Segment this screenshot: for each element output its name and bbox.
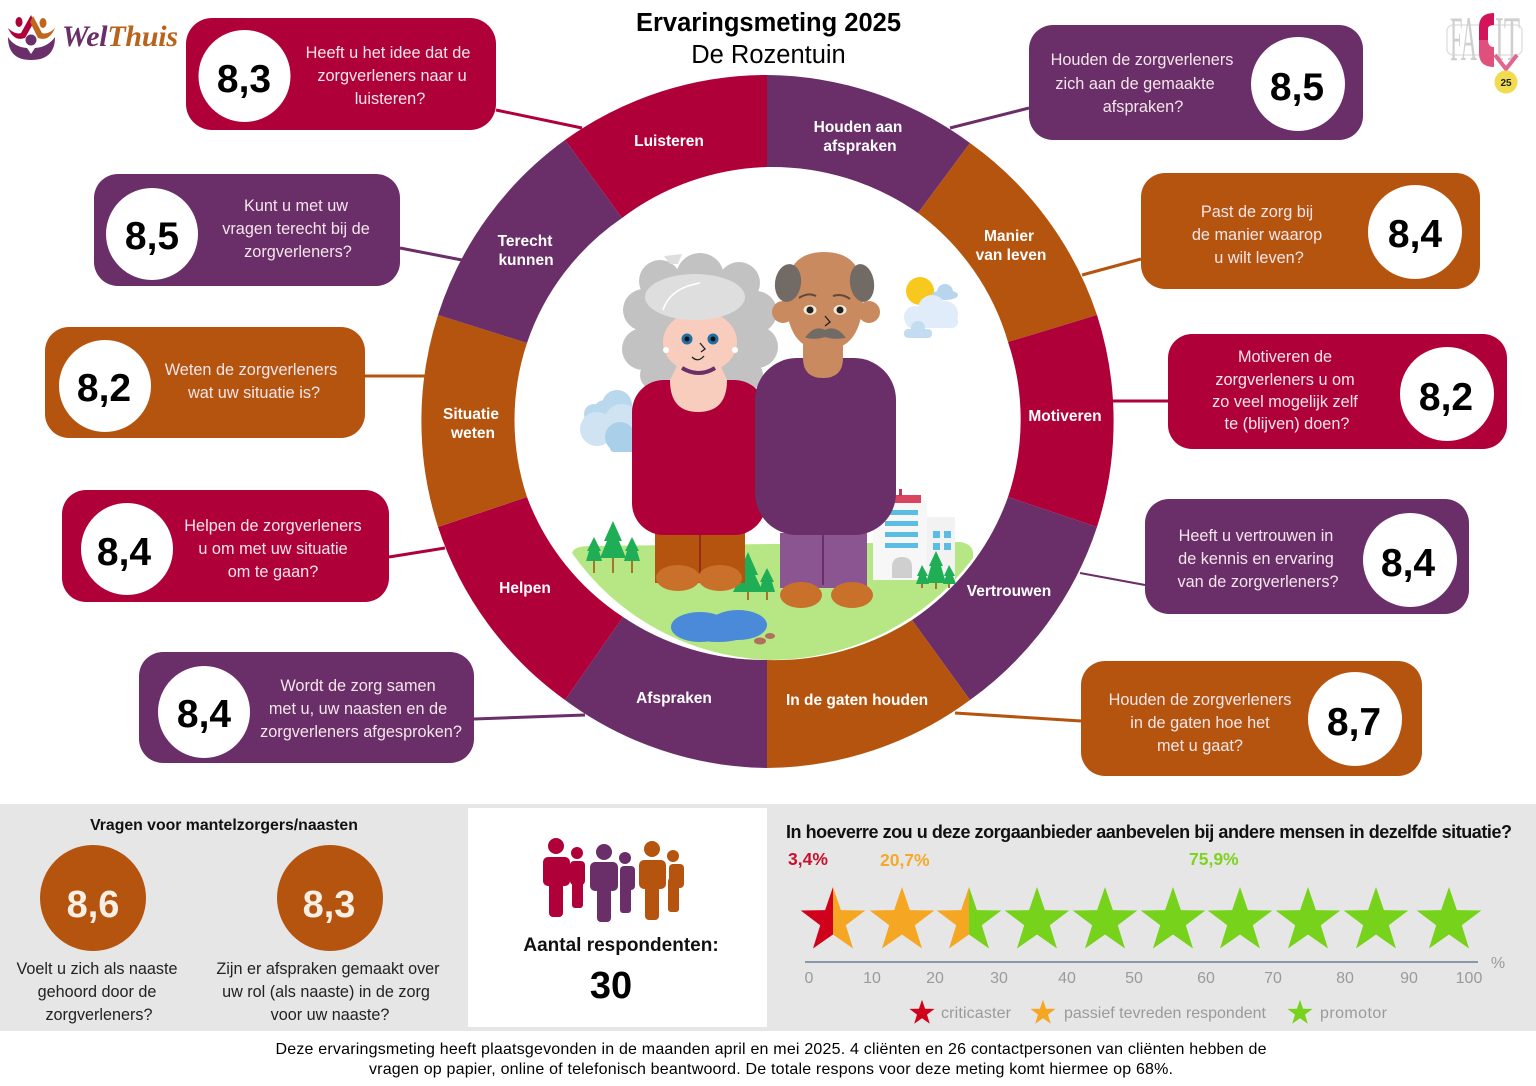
axis: 40 <box>1058 970 1076 987</box>
segment: Situatie weten: weten <box>450 425 495 442</box>
woman <box>622 253 778 591</box>
segment: Houden aan afspraken: afspraken <box>823 138 897 155</box>
title: De Rozentuin <box>691 41 846 69</box>
segment: Houden aan afspraken: Houden aan <box>814 119 902 136</box>
segment: Terecht kunnen: kunnen <box>498 252 554 269</box>
star rating <box>801 887 1481 948</box>
callout: Luisteren 8,3: zorgverleners naar u <box>317 67 467 85</box>
callout: Motiveren 8,2: zo veel mogelijk zelf <box>1212 393 1358 411</box>
panel: vragen voor mantelzorgers: gehoord door de <box>38 983 156 1001</box>
callout: Terecht kunnen 8,5: vragen terecht bij de <box>222 220 370 238</box>
callout: Helpen 8,4: om te gaan? <box>228 563 318 581</box>
panel: vragen voor mantelzorgers: Voelt u zich als naaste <box>16 960 178 978</box>
callout: Motiveren 8,2: te (blijven) doen? <box>1225 415 1349 433</box>
cloud left <box>580 390 640 452</box>
score: 8,6: 8,6 <box>67 884 119 926</box>
panel: vragen voor mantelzorgers: zorgverleners? <box>45 1006 153 1024</box>
callout: Vertrouwen 8,4: van de zorgverleners? <box>1177 573 1339 591</box>
callout: In de gaten houden 8,7: Houden de zorgverleners <box>1109 691 1291 709</box>
sun and clouds right <box>904 277 958 338</box>
segment: Terecht kunnen <box>438 140 622 343</box>
man <box>755 252 896 608</box>
segment: Vertrouwen: Vertrouwen <box>967 583 1051 600</box>
callout: Motiveren 8,2: 8,2 <box>1419 376 1473 419</box>
callout: Vertrouwen 8,4: 8,4 <box>1381 542 1435 585</box>
callout: Helpen 8,4: Helpen de zorgverleners <box>184 517 362 535</box>
callout: Situatie weten 8,2: Weten de zorgverleners <box>165 361 337 379</box>
trees <box>586 521 956 600</box>
segment: Afspraken <box>565 617 767 768</box>
panel: aanbeveling <box>786 822 1512 1024</box>
percentages <box>788 849 1239 870</box>
legend: promotor <box>1320 1005 1388 1022</box>
score: 8,6 <box>40 845 146 951</box>
title <box>636 9 901 69</box>
callout: Afspraken 8,4: met u, uw naasten en de <box>269 700 447 718</box>
logo: WelThuis <box>8 15 178 60</box>
callout: Situatie weten 8,2 <box>45 327 365 438</box>
illustration: elderly couple in landscape <box>572 252 973 660</box>
panel: aantal respondenten: Aantal respondenten: <box>523 935 719 956</box>
segment: Helpen: Helpen <box>499 580 551 597</box>
callout: Situatie weten 8,2: 8,2 <box>77 367 131 410</box>
building <box>873 489 955 580</box>
segment: In de gaten houden <box>767 620 970 768</box>
segment: Manier van leven <box>918 143 1097 342</box>
percentages: 75,9% <box>1189 849 1239 869</box>
callout: Manier van leven 8,4 <box>1141 173 1480 289</box>
segment: Houden aan afspraken <box>767 75 970 213</box>
score: 8,3: 8,3 <box>303 884 355 926</box>
callout: Houden aan afspraken 8,5: afspraken? <box>1103 98 1183 116</box>
panel: vragen voor mantelzorgers: voor uw naaste? <box>271 1006 389 1024</box>
callout: Luisteren 8,3: 8,3 <box>217 58 271 101</box>
callout: Manier van leven 8,4: de manier waarop <box>1192 226 1322 244</box>
callout: Terecht kunnen 8,5: 8,5 <box>125 215 179 258</box>
panel: aanbeveling: In hoeverre zou u deze zorgaanbieder aanbevelen bij andere mensen in dezelfde situatie? <box>786 822 1512 842</box>
pond with ducks <box>671 610 775 644</box>
title: Ervaringsmeting 2025 <box>636 9 901 37</box>
axis: 10 <box>863 970 881 987</box>
axis: 100 <box>1456 970 1482 987</box>
axis: 90 <box>1400 970 1418 987</box>
axis: 0 <box>805 970 814 987</box>
legend: passief tevreden respondent <box>1064 1005 1267 1022</box>
callout: Vertrouwen 8,4: Heeft u vertrouwen in <box>1179 527 1333 545</box>
callout: Manier van leven 8,4: 8,4 <box>1388 213 1442 256</box>
score: 8,3 <box>277 845 383 951</box>
segment: Afspraken: Afspraken <box>636 690 712 707</box>
callout: In de gaten houden 8,7: met u gaat? <box>1157 737 1243 755</box>
logo: FACIT medal: FA <box>1450 3 1477 74</box>
axis: 20 <box>926 970 944 987</box>
segment: Motiveren: Motiveren <box>1028 408 1102 425</box>
footer text <box>276 1041 1267 1078</box>
axis: 60 <box>1197 970 1215 987</box>
footer text: Deze ervaringsmeting heeft plaatsgevonden in de maanden april en mei 2025. 4 cliënten en 26 contactpersonen van cliënten hebben de <box>276 1041 1267 1058</box>
segment: Terecht kunnen: Terecht <box>498 233 552 250</box>
segment: Luisteren <box>565 75 767 218</box>
logo: FACIT medal: 25 <box>1500 78 1512 89</box>
callout: In de gaten houden 8,7 <box>1081 661 1422 776</box>
segment: In de gaten houden: In de gaten houden <box>786 692 928 709</box>
callout: Terecht kunnen 8,5: zorgverleners? <box>244 243 352 261</box>
callout: In de gaten houden 8,7: 8,7 <box>1327 701 1381 744</box>
percentages: 3,4% <box>788 849 828 869</box>
callout: Situatie weten 8,2: wat uw situatie is? <box>187 384 320 402</box>
axis: 50 <box>1125 970 1143 987</box>
percentages: 20,7% <box>880 850 930 870</box>
callout: Luisteren 8,3: luisteren? <box>355 90 425 108</box>
panel: vragen voor mantelzorgers <box>16 817 440 1024</box>
callout: Houden aan afspraken 8,5 <box>1029 25 1363 140</box>
callout: Manier van leven 8,4: u wilt leven? <box>1214 249 1304 267</box>
axis: 70 <box>1264 970 1282 987</box>
callout: Motiveren 8,2: zorgverleners u om <box>1215 371 1355 389</box>
ring of ten themes <box>421 75 1114 768</box>
segment: Luisteren: Luisteren <box>634 133 704 150</box>
callout: Afspraken 8,4: Wordt de zorg samen <box>280 677 436 695</box>
callout: Terecht kunnen 8,5 <box>94 174 400 286</box>
callout: In de gaten houden 8,7: in de gaten hoe het <box>1130 714 1270 732</box>
legend: criticaster <box>941 1005 1012 1022</box>
callout: Luisteren 8,3: Heeft u het idee dat de <box>306 44 470 62</box>
callout: Afspraken 8,4: zorgverleners afgesproken? <box>260 723 462 741</box>
ground <box>572 542 973 660</box>
panel: vragen voor mantelzorgers: Zijn er afspraken gemaakt over <box>216 960 440 978</box>
callout: Vertrouwen 8,4: de kennis en ervaring <box>1178 550 1334 568</box>
segment: Motiveren <box>1008 315 1114 527</box>
callout: Helpen 8,4: 8,4 <box>97 531 151 574</box>
callout: Motiveren 8,2 <box>1168 334 1507 449</box>
callout: Afspraken 8,4: 8,4 <box>177 693 231 736</box>
callout: Manier van leven 8,4: Past de zorg bij <box>1201 203 1313 221</box>
axis: 80 <box>1336 970 1354 987</box>
panel: vragen voor mantelzorgers: Vragen voor mantelzorgers/naasten <box>90 817 358 834</box>
panel: aantal respondenten <box>468 808 767 1027</box>
callout: Luisteren 8,3 <box>186 18 496 130</box>
segment: Manier van leven: Manier <box>984 228 1034 245</box>
connector lines <box>365 108 1168 721</box>
callout: Houden aan afspraken 8,5: Houden de zorgverleners <box>1051 51 1233 69</box>
callout: Terecht kunnen 8,5: Kunt u met uw <box>244 197 348 215</box>
axis: 30 <box>990 970 1008 987</box>
segment: Manier van leven: van leven <box>976 247 1046 264</box>
segment: Helpen <box>438 497 623 700</box>
logo: WelThuis: WelThuis <box>62 20 178 53</box>
callout: Helpen 8,4: u om met uw situatie <box>198 540 348 558</box>
segment: Vertrouwen <box>912 497 1097 700</box>
segment: Situatie weten: Situatie <box>443 406 499 423</box>
icon: people <box>543 838 684 922</box>
panel: aantal respondenten: 30 <box>590 965 632 1007</box>
callout: Houden aan afspraken 8,5: 8,5 <box>1270 66 1324 109</box>
segment: Situatie weten <box>421 315 527 527</box>
callout: Houden aan afspraken 8,5: zich aan de gemaakte <box>1055 75 1215 93</box>
axis <box>805 955 1505 987</box>
footer text: vragen op papier, online of telefonisch beantwoord. De totale respons voor deze meting komt hiermee op 68%. <box>369 1061 1173 1078</box>
callout: Afspraken 8,4 <box>139 652 474 763</box>
callout: Helpen 8,4 <box>62 490 389 602</box>
axis: % <box>1491 955 1505 972</box>
callout: Vertrouwen 8,4 <box>1145 499 1469 614</box>
legend <box>909 1000 1388 1024</box>
panel: bottom background <box>0 804 1536 1031</box>
panel: vragen voor mantelzorgers: uw rol (als naaste) in de zorg <box>222 983 430 1001</box>
callout: Motiveren 8,2: Motiveren de <box>1238 348 1332 366</box>
